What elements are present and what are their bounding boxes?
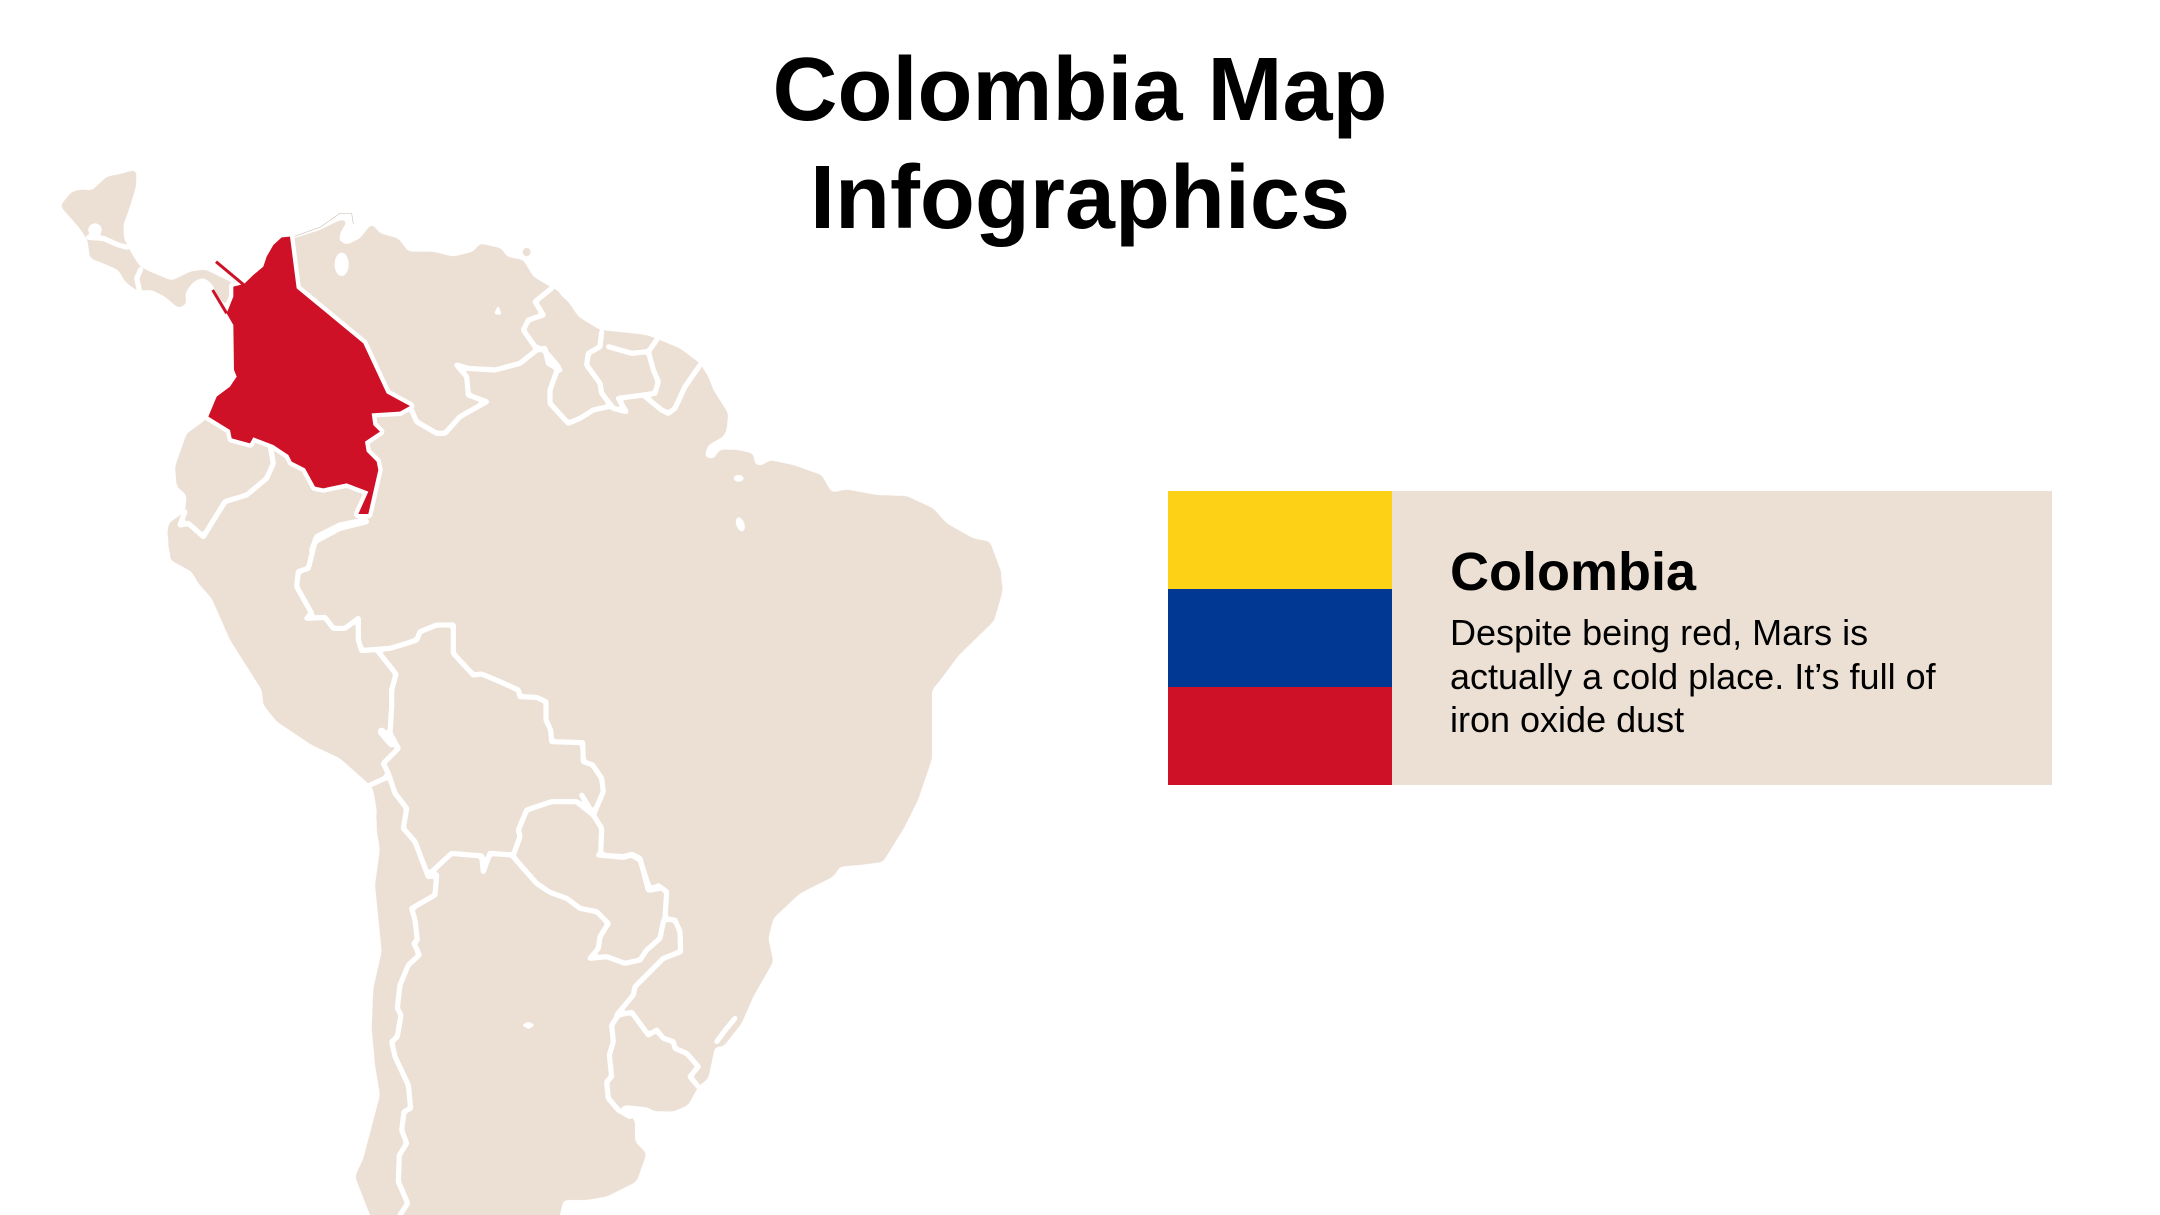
title [772, 40, 1388, 248]
panel heading: Colombia [1450, 542, 1697, 602]
country borders [88, 223, 747, 1215]
panel body text: iron oxide dust [1450, 699, 1684, 740]
map: South America [60, 169, 1003, 1215]
panel body text [1450, 612, 1937, 740]
panel body text: Despite being red, Mars is [1450, 612, 1868, 653]
panel body text: actually a cold place. It’s full of [1450, 656, 1937, 697]
panel: Colombia info [1168, 491, 2052, 785]
panel background [1392, 491, 2052, 785]
title: Infographics [810, 148, 1350, 248]
land mass [60, 169, 1003, 1215]
title: Colombia Map [772, 40, 1388, 140]
Colombia highlighted [208, 237, 410, 514]
icon: Colombian flag [1168, 491, 1392, 785]
thin outline: Guajira peninsula [293, 213, 353, 237]
